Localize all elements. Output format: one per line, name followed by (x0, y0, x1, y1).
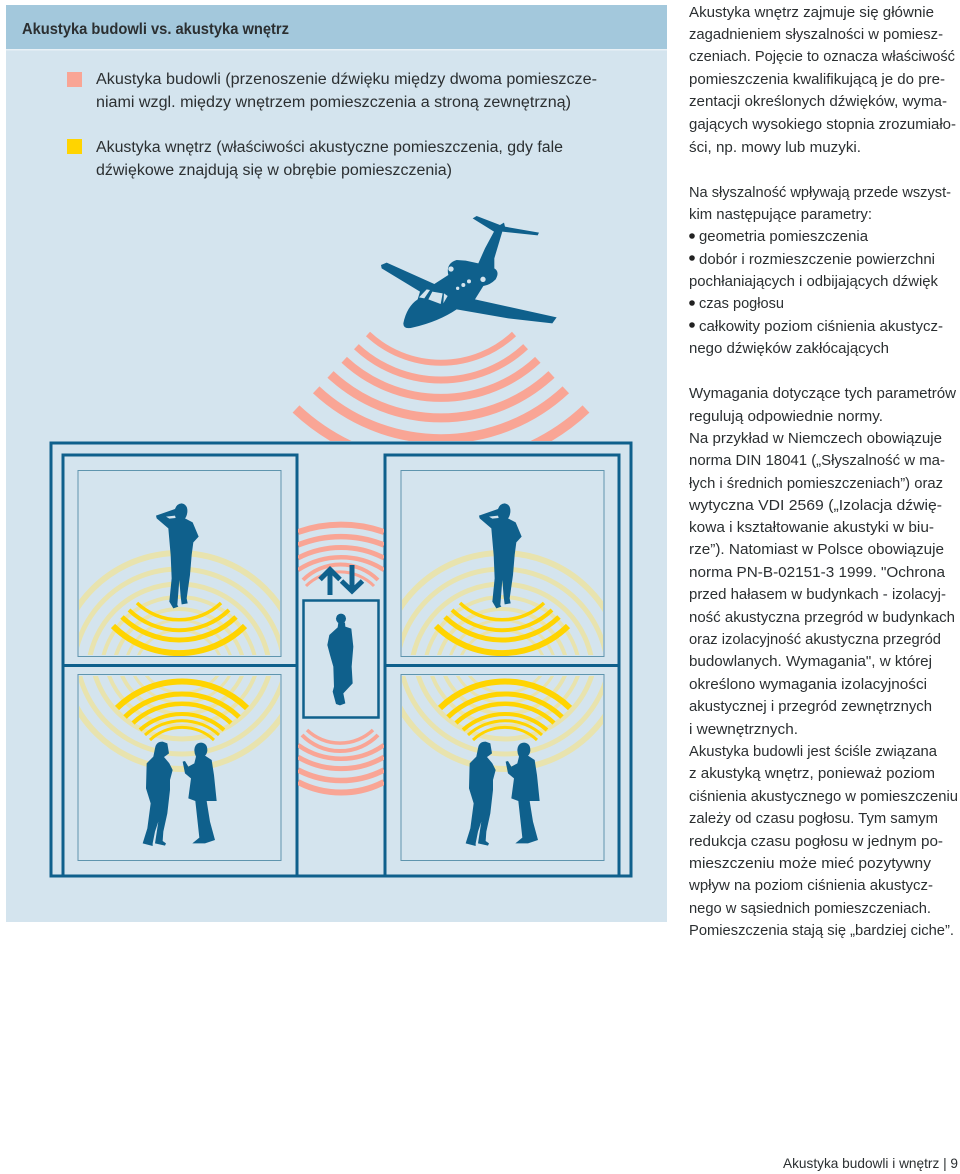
text block: standards and relationship: akustycznej i przegród zewnętrznych (689, 698, 932, 715)
text block: standards and relationship: Wymagania dotyczące tych parametrów (689, 385, 956, 402)
legend: room acoustics: dźwiękowe znajdują się w obrębie pomieszczenia) (96, 162, 452, 179)
building outline (51, 443, 631, 876)
text block: standards and relationship: i wewnętrznych. (689, 721, 798, 738)
arrows: sound transmission up and down (320, 565, 362, 595)
panel: illustration background (6, 5, 667, 922)
room: top right with listener (380, 470, 624, 797)
text block: intro paragraph: ści, np. mowy lub muzyki. (689, 139, 861, 156)
text block: intro paragraph: pomieszczenia kwalifikującą je do pre- (689, 71, 945, 88)
text block: audibility parameters list: Na słyszalność wpływają przede wszyst- (689, 184, 951, 201)
text block: standards and relationship: Pomieszczenia stają się „bardziej ciche”. (689, 922, 954, 939)
legend: building acoustics: Akustyka budowli (przenoszenie dźwięku między dwoma pomieszcze- (96, 71, 597, 88)
room: top left with listener (57, 470, 301, 797)
text block: standards and relationship: Na przykład w Niemczech obowiązuje (689, 430, 942, 447)
text block: audibility parameters list: całkowity poziom ciśnienia akustycz- (699, 318, 943, 335)
text block: standards and relationship: określono wymagania izolacyjności (689, 676, 927, 693)
text block: standards and relationship: przed hałasem w budynkach - izolacyj- (689, 586, 946, 603)
text block: standards and relationship: rze”). Natomiast w Polsce obowiązuje (689, 541, 944, 558)
text block: standards and relationship: nego w sąsiednich pomieszczeniach. (689, 900, 931, 917)
room: bottom left with two people talking (61, 527, 303, 860)
text block: audibility parameters list: czas pogłosu (699, 295, 784, 312)
text block: standards and relationship: mieszczeniu może mieć pozytywny (689, 855, 932, 872)
text block: standards and relationship: Akustyka budowli jest ściśle związana (689, 743, 938, 760)
sound waves below lift (298, 730, 384, 793)
text block: intro paragraph: zagadnieniem słyszalności w pomiesz- (689, 26, 943, 43)
text block: standards and relationship: wytyczna VDI 2569 („Izolacja dźwię- (688, 497, 942, 514)
text block: intro paragraph: gających wysokiego stopnia zrozumiało- (689, 116, 956, 133)
heading band: Akustyka budowli vs. akustyka wnętrz (22, 21, 289, 38)
text block: audibility parameters list (689, 184, 951, 357)
text block: standards and relationship: redukcja czasu pogłosu w jednym po- (689, 833, 943, 850)
text block: intro paragraph: Akustyka wnętrz zajmuje się głównie (689, 4, 934, 21)
legend: building acoustics: niami wzgl. między wnętrzem pomieszczenia a stroną zewnętrzną) (96, 94, 571, 111)
text block: standards and relationship: łych i średnich pomieszczeniach”) oraz (689, 475, 943, 492)
text block: standards and relationship: wpływ na poziom ciśnienia akustycz- (688, 877, 933, 894)
text block: standards and relationship: norma PN-B-02151-3 1999. "Ochrona (689, 564, 946, 581)
text block: standards and relationship (688, 385, 958, 939)
text block: intro paragraph: zentacji określonych dźwięków, wyma- (689, 93, 947, 110)
text block: standards and relationship: budowlanych. Wymagania", w której (689, 653, 932, 670)
text block: audibility parameters list: nego dźwięków zakłócających (689, 340, 889, 357)
text block: audibility parameters list: dobór i rozmieszczenie powierzchni (699, 251, 935, 268)
legend: building acoustics (67, 71, 597, 111)
text block: standards and relationship: z akustyką wnętrz, ponieważ poziom (689, 765, 935, 782)
text block: standards and relationship: norma DIN 18041 („Słyszalność w ma- (689, 452, 945, 469)
text block: audibility parameters list: geometria pomieszczenia (699, 228, 869, 245)
text block: standards and relationship: regulują odpowiednie normy. (689, 408, 883, 425)
sound waves from airplane (292, 332, 590, 441)
text block: standards and relationship: ciśnienia akustycznego w pomieszczeniu (689, 788, 958, 805)
footer: page label: Akustyka budowli i wnętrz | 9 (783, 1155, 958, 1171)
lift with person (304, 600, 378, 718)
text block: standards and relationship: kowa i kształtowanie akustyki w biu- (689, 519, 934, 536)
text block: standards and relationship: oraz izolacyjność akustyczna przegród (689, 631, 941, 648)
room: bottom right with two people talking (384, 527, 626, 860)
sound waves above lift (298, 525, 384, 586)
text block: standards and relationship: zależy od czasu pogłosu. Tym samym (689, 810, 938, 827)
icon: airplane (381, 216, 557, 328)
legend: room acoustics (67, 139, 563, 179)
text block: audibility parameters list: kim następujące parametry: (689, 206, 872, 223)
legend: room acoustics: Akustyka wnętrz (właściwości akustyczne pomieszczenia, gdy fale (96, 139, 563, 156)
text block: audibility parameters list: pochłaniających i odbijających dźwięk (689, 273, 938, 290)
heading band (6, 5, 667, 49)
text block: standards and relationship: ność akustyczna przegród w budynkach (689, 609, 955, 626)
text block: intro paragraph: czeniach. Pojęcie to oznacza właściwość (689, 48, 955, 65)
text block: intro paragraph (689, 4, 956, 156)
